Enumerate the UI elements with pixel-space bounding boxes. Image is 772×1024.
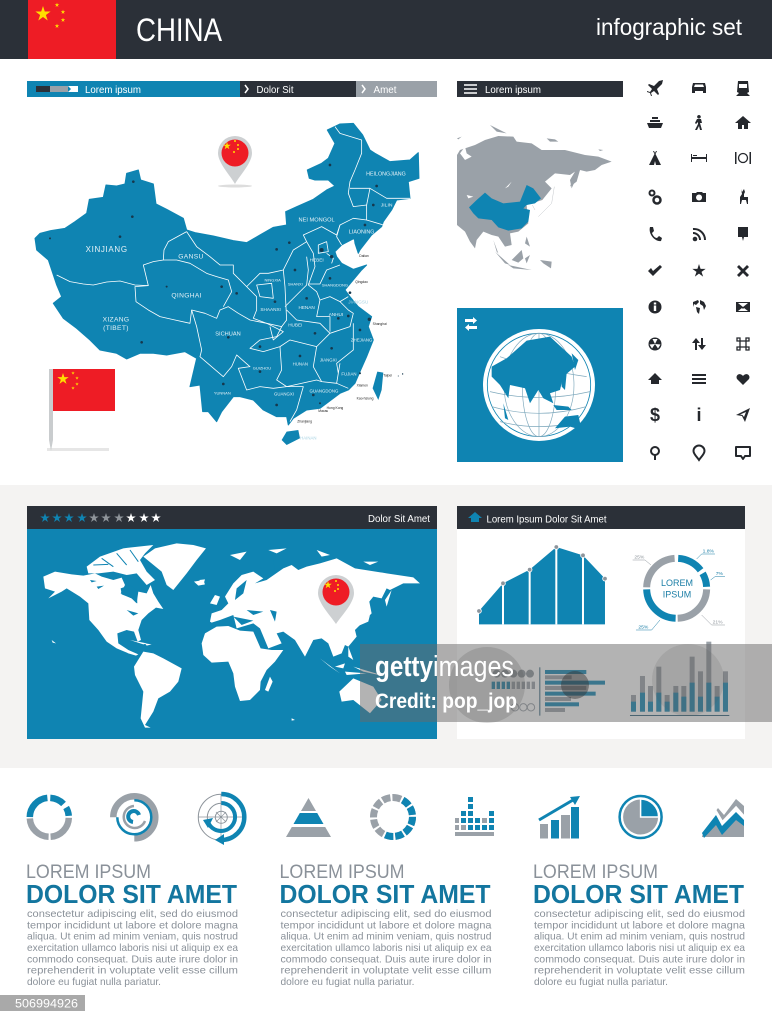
city names: Hong Kong <box>327 406 343 410</box>
icon: cutlery <box>735 152 751 164</box>
donut chart: 25% <box>638 624 649 630</box>
icon: pie chart <box>620 796 662 838</box>
province labels: SHAANXI <box>260 307 281 312</box>
province labels: ANHUI <box>329 312 343 317</box>
flag on pole <box>47 369 115 451</box>
icon: pin 2 <box>694 446 704 460</box>
province labels: HEBEI <box>310 258 324 263</box>
icon: world <box>693 300 706 314</box>
infographic icon row <box>30 794 744 845</box>
text column 1: exercitation ullamco laboris nisi ut aliquip ex ea <box>27 943 238 954</box>
icon: segmented ring <box>30 798 69 837</box>
panel: Lorem ipsum header <box>457 81 623 97</box>
icon: pyramid <box>286 798 331 837</box>
subtitle: infographic set <box>596 14 743 40</box>
watermark <box>360 644 772 723</box>
text column 2 <box>280 861 492 988</box>
province labels: SHANGDONG <box>322 282 348 287</box>
text column 3: LOREM IPSUM <box>533 861 658 883</box>
icon: speech bubble <box>736 447 750 459</box>
text column 1 <box>26 861 238 988</box>
icon: gears <box>650 190 660 204</box>
donut chart <box>633 549 725 630</box>
Americas landmasses <box>43 543 206 728</box>
text column 2: tempor incididunt ut labore et dolore magna <box>280 920 492 931</box>
icon: menu <box>692 374 706 384</box>
breadcrumb navigation: Dolor Sit <box>256 84 294 96</box>
city dots <box>49 164 403 406</box>
icon: up down arrows <box>692 338 706 350</box>
watermark: images <box>433 651 514 683</box>
icon: pin 1 <box>651 447 659 460</box>
province labels: JILIN <box>381 203 393 209</box>
panel: world map <box>27 506 437 739</box>
province labels: NEI MONGOL <box>299 218 335 224</box>
icon: star <box>692 264 706 277</box>
province labels: YUNNAN <box>214 391 231 396</box>
icon: up home arrow <box>648 373 662 384</box>
icon: ship <box>647 117 663 128</box>
icon: cross <box>737 265 749 277</box>
icon: deer <box>740 189 748 204</box>
icon: check <box>648 265 662 276</box>
breadcrumb navigation: Amet <box>374 84 397 96</box>
icon: growth bars with arrow <box>539 796 580 838</box>
icon: plane <box>647 80 663 96</box>
province labels: GUIZHOU <box>253 366 271 371</box>
image id tag <box>0 995 85 1011</box>
donut chart: 25% <box>634 555 645 561</box>
icon: radar wheel <box>198 794 244 845</box>
pictogram rows and horizontal bars <box>492 667 605 716</box>
city names <box>297 254 392 424</box>
location pin on world map <box>318 575 354 624</box>
city names: Macau <box>318 409 328 413</box>
text column 3: tempor incididunt ut labore et dolore magna <box>534 920 745 931</box>
icon: tent <box>649 151 661 165</box>
text column 1: tempor incididunt ut labore et dolore magna <box>27 920 238 931</box>
text column 2: DOLOR SIT AMET <box>280 881 491 909</box>
panel: Lorem ipsum header: Lorem ipsum <box>485 84 541 96</box>
text column 2: consectetur adipiscing elit, sed do eiusmod <box>280 909 492 920</box>
title: CHINA <box>136 12 223 48</box>
text column 1: aliqua. Ut enim ad minim veniam, quis nostrud <box>27 932 238 943</box>
province labels: HEILONGJIANG <box>366 172 406 178</box>
city names: Shanghai <box>373 322 387 326</box>
icon: walker <box>695 115 702 130</box>
icon: swap arrows <box>465 317 477 331</box>
info letter icon: i <box>696 405 702 425</box>
province labels: JIANGSU <box>348 299 368 304</box>
text column 3: aliqua. Ut enim ad minim veniam, quis nostrud <box>534 932 745 943</box>
dollar icon: $ <box>650 405 660 425</box>
icon grid <box>647 80 751 460</box>
rating stars <box>40 513 161 522</box>
Asia locator map <box>457 125 612 270</box>
grey band background <box>0 485 772 768</box>
donut chart: LOREM <box>661 578 693 588</box>
icon: phone <box>650 227 662 241</box>
image id tag: 506994926 <box>15 996 78 1010</box>
province labels: NINGXIA <box>264 278 281 283</box>
panel: blue globe <box>457 308 623 462</box>
text column 3 <box>533 861 745 988</box>
province borders <box>57 127 410 422</box>
icon: area chart <box>702 799 744 838</box>
icon: dashed ring <box>374 798 412 836</box>
text column 3: DOLOR SIT AMET <box>533 881 744 909</box>
icon: radiation <box>648 338 662 350</box>
text column 3: consectetur adipiscing elit, sed do eiusmod <box>534 909 745 920</box>
icon: train <box>736 81 750 96</box>
donut chart: 7% <box>716 571 723 577</box>
city names: Dalian <box>359 254 369 258</box>
province labels: GUANGDONG <box>310 389 339 394</box>
icon: spiral rings <box>113 796 155 838</box>
city names: Taipei <box>383 373 392 377</box>
icon: house <box>735 116 751 129</box>
city names: Xiamen <box>357 383 368 387</box>
map landmass <box>35 123 419 425</box>
province labels: HUNAN <box>293 362 308 367</box>
icon: mail <box>736 302 750 312</box>
icon: up arrow <box>468 512 482 522</box>
panel: charts <box>457 506 745 739</box>
donut chart: 21% <box>713 619 723 625</box>
watermark: getty <box>375 651 433 683</box>
stacked bar chart <box>630 642 729 716</box>
text column 1: consectetur adipiscing elit, sed do eiusmod <box>27 909 238 920</box>
province labels: FUJIAN <box>341 371 357 376</box>
province labels: HUBEI <box>288 322 302 327</box>
province labels: QINGHAI <box>171 293 202 300</box>
text column 2: dolore eu fugiat nulla pariatur. <box>280 977 414 988</box>
icon: bed <box>691 154 707 162</box>
text column 3: exercitation ullamco laboris nisi ut aliquip ex ea <box>534 943 745 954</box>
China map <box>35 123 419 445</box>
header flag <box>28 0 116 59</box>
globe <box>483 329 595 441</box>
text column 2: LOREM IPSUM <box>280 861 404 883</box>
icon: heart <box>737 374 749 385</box>
province labels: LIAONING <box>349 230 374 236</box>
icon: info <box>648 300 662 314</box>
province labels: (TIBET) <box>103 325 129 332</box>
donut chart: 1.8% <box>703 549 715 555</box>
header bar <box>0 0 772 59</box>
province labels: HENAN <box>298 305 315 310</box>
province labels: SHANXI <box>288 282 303 287</box>
text column 1: reprehenderit in voluptate velit esse cillum <box>27 966 238 977</box>
icon: car <box>692 83 706 93</box>
icon: rss <box>693 229 705 241</box>
text column 1: DOLOR SIT AMET <box>26 881 237 909</box>
icon: command <box>737 338 749 350</box>
panel label: Dolor Sit Amet <box>368 513 430 525</box>
Old World landmasses <box>199 548 420 721</box>
text column 3: dolore eu fugiat nulla pariatur. <box>534 977 668 988</box>
text column 3: reprehenderit in voluptate velit esse cillum <box>534 966 745 977</box>
city names: Qingdao <box>355 280 368 284</box>
text column 1: dolore eu fugiat nulla pariatur. <box>27 977 161 988</box>
text column 2: reprehenderit in voluptate velit esse cillum <box>280 966 492 977</box>
breadcrumb navigation <box>27 81 437 97</box>
area chart <box>477 545 607 624</box>
watermark: Credit: pop_jop <box>375 690 517 713</box>
icon: note pin <box>738 227 748 241</box>
icon: block columns <box>455 797 494 836</box>
province labels: GUANGXI <box>274 392 294 397</box>
donut chart: IPSUM <box>663 589 691 599</box>
province labels: GANSU <box>178 253 204 260</box>
text column 1: LOREM IPSUM <box>26 861 151 883</box>
province labels: JIANGXI <box>320 358 337 363</box>
text column 2: commodo consequat. Duis aute irure dolor in <box>280 954 492 965</box>
icon: navigate <box>736 408 750 422</box>
icon: camera <box>692 192 706 202</box>
text column 2: aliqua. Ut enim ad minim veniam, quis nostrud <box>280 932 492 943</box>
province labels: SICHUAN <box>215 331 241 337</box>
province labels <box>86 172 406 441</box>
city names: Kao-hsiung <box>357 396 374 400</box>
location pin with flag <box>218 136 252 188</box>
province labels: ZHEJIANG <box>351 338 373 343</box>
province labels: HAINAN <box>300 436 316 441</box>
breadcrumb navigation: Lorem ipsum <box>85 84 141 96</box>
panel heading: Lorem Ipsum Dolor Sit Amet <box>486 514 607 526</box>
text column 1: commodo consequat. Duis aute irure dolor in <box>27 954 238 965</box>
text column 2: exercitation ullamco laboris nisi ut aliquip ex ea <box>280 943 492 954</box>
province labels: XIZANG <box>103 317 129 324</box>
province labels: XINJIANG <box>86 245 128 254</box>
city names: Zhanjiang <box>297 420 312 424</box>
text column 3: commodo consequat. Duis aute irure dolor in <box>534 954 745 965</box>
